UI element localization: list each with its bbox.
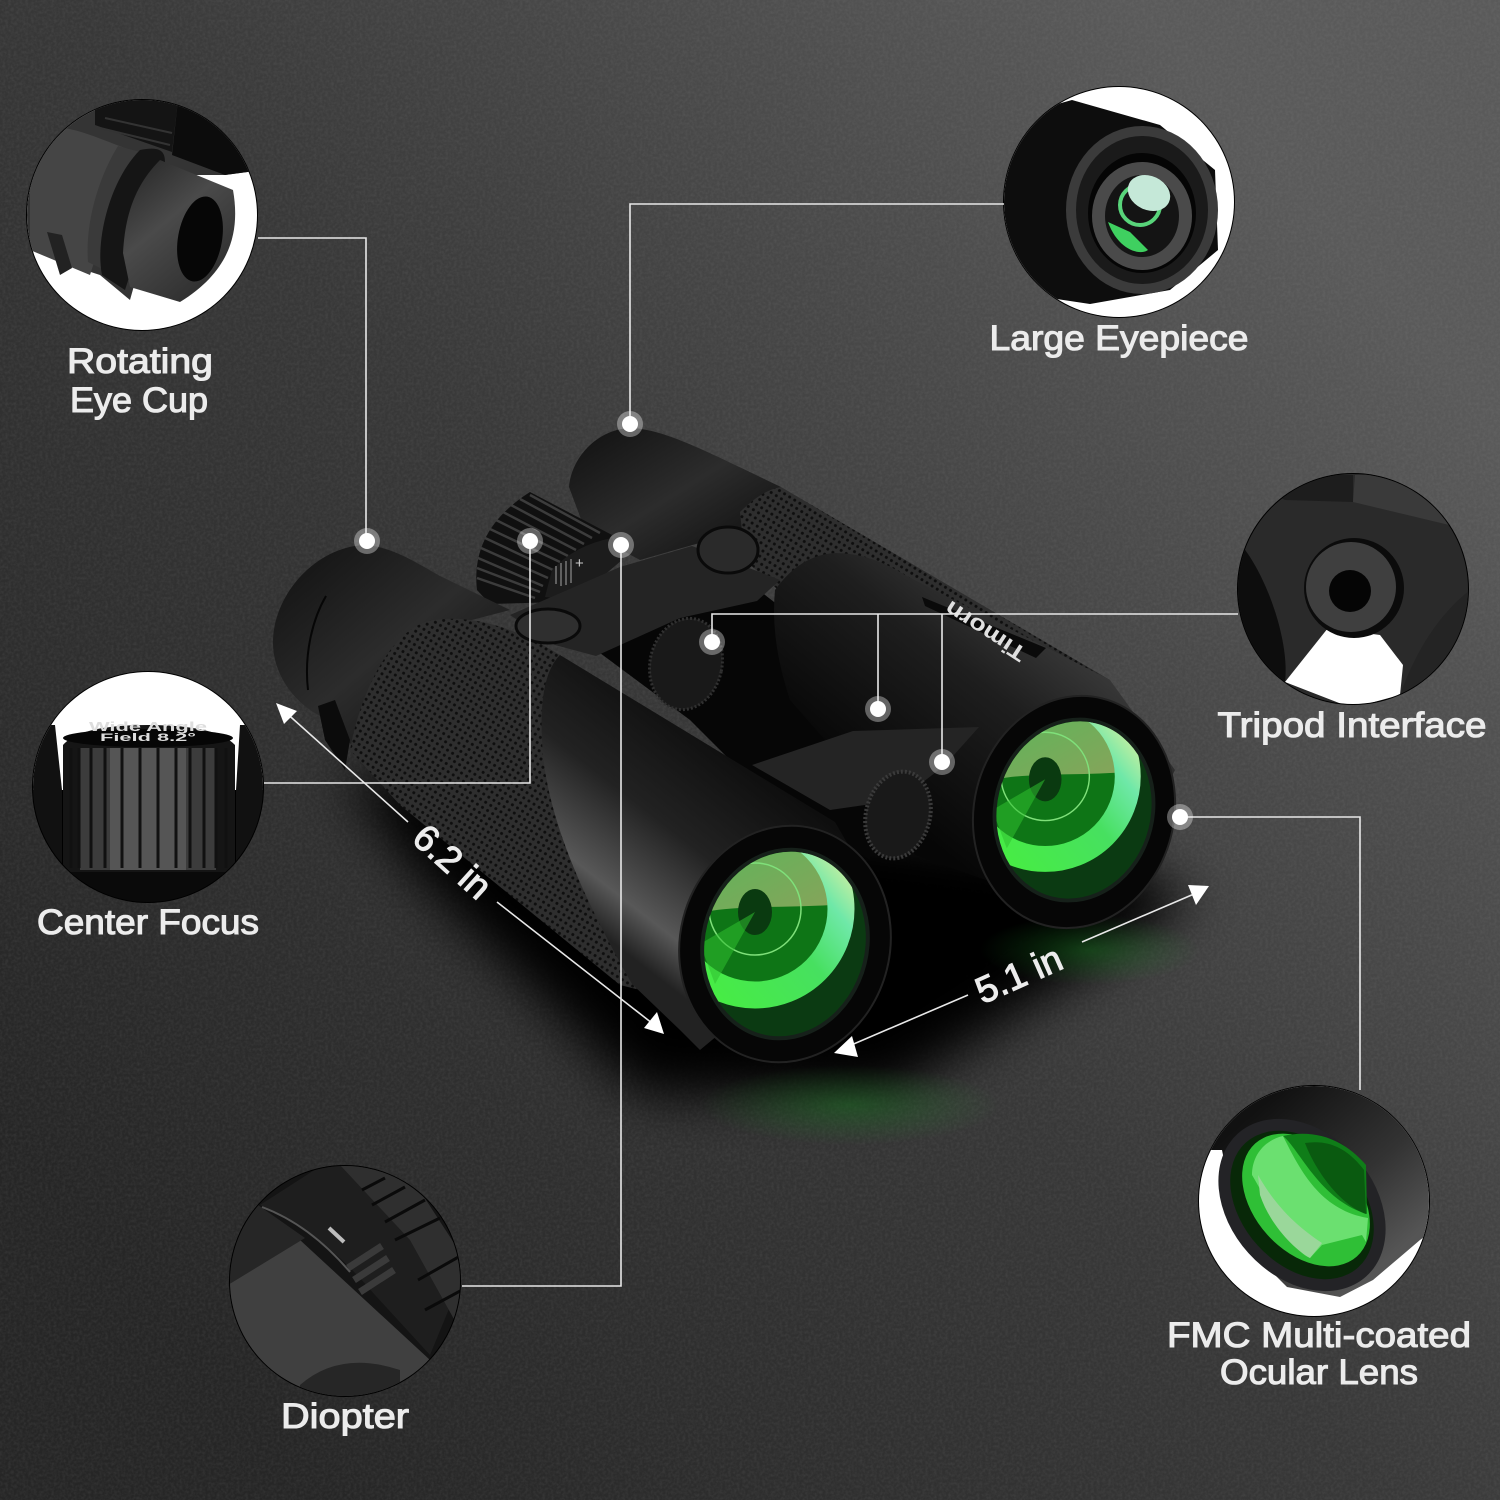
inset: center focus: Field 8.2° <box>100 732 196 744</box>
label: center focus: Center Focus <box>37 903 259 942</box>
label: diopter: Diopter <box>281 1397 409 1436</box>
left barrel rubber <box>350 619 640 990</box>
front focus dial <box>856 765 940 865</box>
leader: rotating eye cup <box>258 238 366 541</box>
dimension: length 6.2 in: 6.2 in <box>405 816 500 907</box>
top bridge <box>510 546 780 656</box>
label: fmc multi-coated ocular lens: FMC Multi-coated <box>1167 1316 1471 1355</box>
label: rotating eye cup: Eye Cup <box>70 381 208 420</box>
leader: tripod interface <box>712 614 1238 762</box>
leader: diopter <box>462 545 621 1286</box>
label: rotating eye cup <box>67 342 213 420</box>
ground shadow <box>340 770 1200 1145</box>
label: tripod interface: Tripod Interface <box>1218 706 1486 745</box>
label: fmc multi-coated ocular lens <box>1167 1316 1471 1392</box>
lower bridge <box>752 727 979 810</box>
leader: center focus <box>264 541 530 783</box>
left eye cup seam <box>307 596 326 690</box>
brand plate <box>922 596 1046 667</box>
inset: large eyepiece <box>1000 85 1240 320</box>
right diopter dial <box>641 612 731 716</box>
leader: large eyepiece <box>630 204 1004 423</box>
inset: center focus: Wide Angle <box>89 719 207 734</box>
label: fmc multi-coated ocular lens: Ocular Lens <box>1220 1353 1418 1392</box>
focus wheel: + <box>575 555 584 572</box>
right objective <box>949 674 1199 950</box>
bridge button <box>516 609 580 643</box>
inset: tripod interface <box>1235 470 1471 708</box>
binoculars <box>273 428 1199 1085</box>
right barrel rubber <box>740 487 1110 700</box>
anchor dots <box>354 411 1193 830</box>
focus wheel <box>476 492 622 604</box>
dimension: length 6.2 in <box>276 703 664 1034</box>
gap between barrels <box>596 560 900 860</box>
bridge button two <box>698 527 758 573</box>
label: large eyepiece: Large Eyepiece <box>990 319 1248 358</box>
inset: diopter <box>225 1160 465 1400</box>
left barrel body <box>542 655 880 1050</box>
inset: center focus <box>30 670 266 907</box>
right barrel body <box>774 553 1175 920</box>
brand plate: Timorn <box>940 596 1031 667</box>
inset: fmc lens <box>1198 1085 1430 1317</box>
label: rotating eye cup: Rotating <box>67 342 213 381</box>
inset: rotating eye cup <box>20 98 262 333</box>
left eye cup clip <box>318 700 350 770</box>
right eye cup <box>569 428 781 560</box>
leader: fmc lens <box>1180 817 1360 1090</box>
dimension: width 5.1 in <box>834 885 1209 1057</box>
dimension: width 5.1 in: 5.1 in <box>969 937 1069 1012</box>
left eye cup <box>273 545 510 745</box>
left objective <box>654 803 916 1085</box>
